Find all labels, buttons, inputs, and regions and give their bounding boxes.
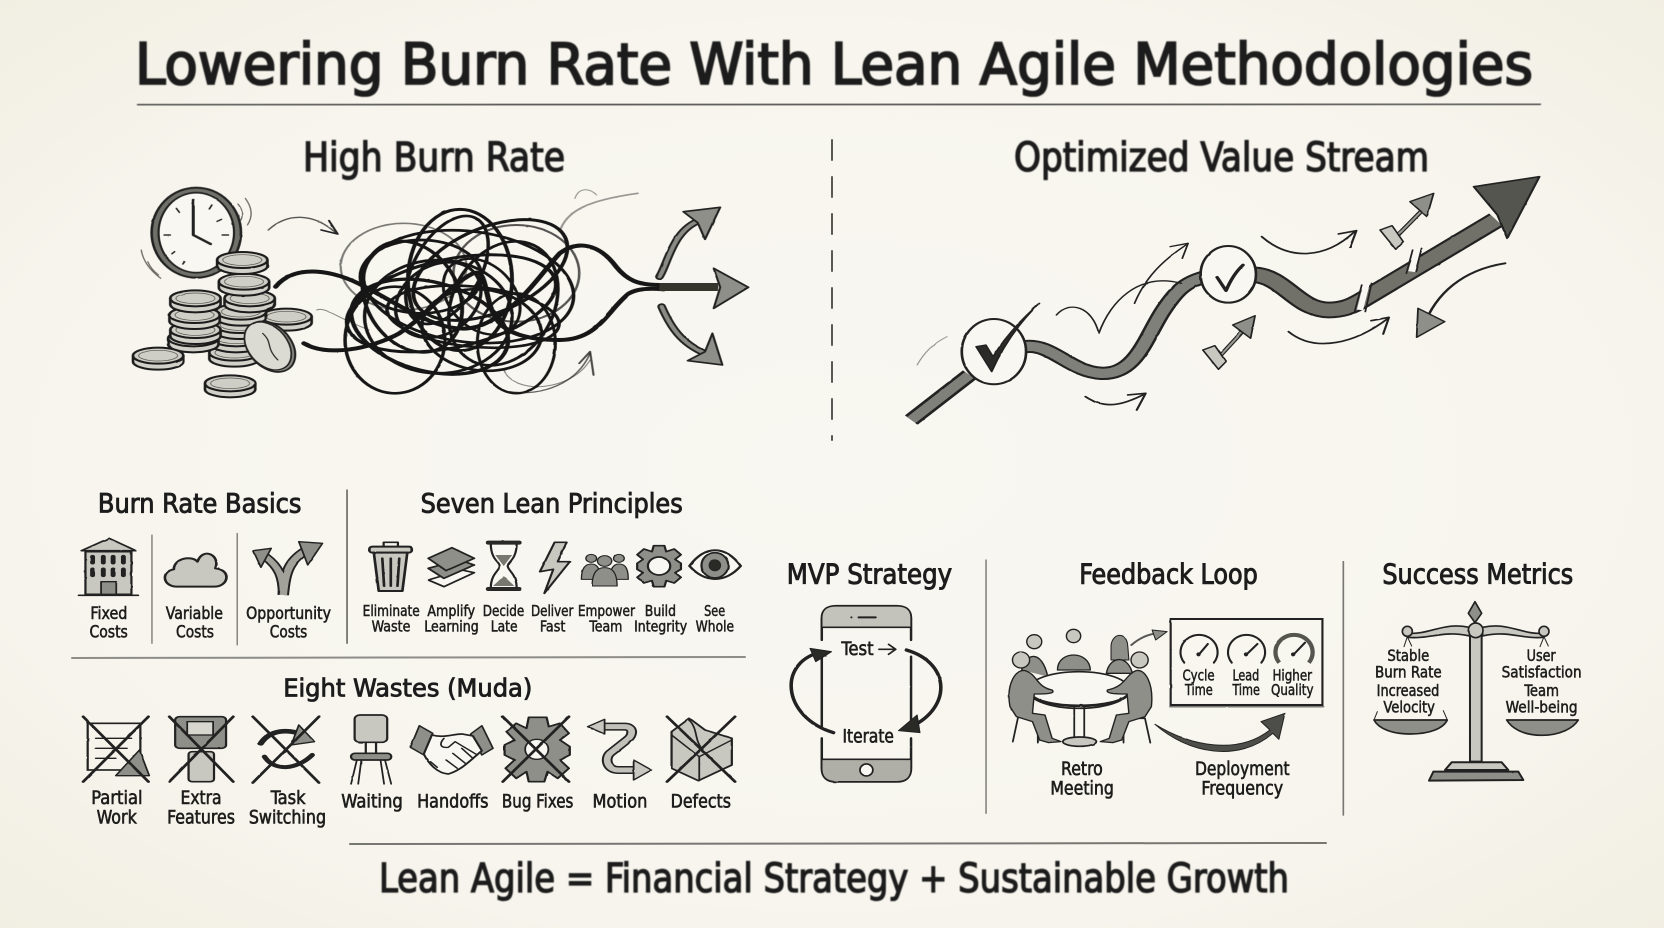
label: left pan metrics: Stable [1387, 646, 1429, 665]
label: bug fixes: Bug Fixes [502, 791, 573, 812]
label: deliver fast: Deliver [531, 603, 574, 620]
label: cycle time [1182, 667, 1215, 699]
label: opportunity costs: Opportunity [246, 603, 331, 623]
label: variable costs: Variable [166, 603, 223, 623]
arrows: small motion [268, 190, 638, 393]
label: retro meeting: Meeting [1050, 777, 1114, 799]
illustration: retro meeting [1009, 629, 1152, 746]
icon: clock [141, 188, 251, 278]
label: extra features [167, 788, 235, 828]
label: waiting: Waiting [341, 791, 403, 812]
arrow: deployment frequency [1155, 713, 1285, 752]
label: cycle time: Cycle [1182, 667, 1215, 685]
label: deployment frequency: Deployment [1195, 758, 1290, 780]
footer tagline: Lean Agile = Financial Strategy + Sustainable Growth [379, 856, 1289, 902]
icon: handoffs handshake [410, 726, 493, 774]
label: extra features: Features [167, 807, 235, 828]
label: handoffs: Handoffs [417, 791, 489, 812]
label: lead time: Lead [1232, 667, 1259, 685]
label: defects: Defects [671, 791, 731, 812]
icon: waiting chair [351, 715, 391, 784]
label: decide late [483, 603, 524, 636]
label: left pan metrics: Burn Rate [1375, 663, 1442, 682]
heading: burn rate basics: Burn Rate Basics [98, 489, 302, 519]
label: see whole: Whole [696, 619, 734, 636]
label: right pan metrics [1502, 646, 1582, 717]
arrow: to dashboard [1131, 630, 1167, 645]
icon: phone with loop [791, 606, 941, 782]
panel: high burn rate [133, 135, 748, 397]
label: task switching: Task [270, 788, 306, 809]
heading: feedback loop: Feedback Loop [1079, 557, 1258, 590]
label: variable costs [166, 603, 223, 642]
label: see whole: See [704, 603, 725, 620]
icon: hourglass [486, 541, 521, 591]
label: deployment frequency [1195, 758, 1290, 799]
illustration: clock, coins, tangle, arrows [133, 188, 748, 397]
icon: coin stacks [133, 252, 312, 397]
icon: balance scale [1374, 602, 1578, 781]
panel: burn rate basics and lean principles [79, 489, 741, 645]
icon: check circle 1 [962, 303, 1039, 384]
label: amplify learning [424, 603, 479, 636]
heading: optimized value stream: Optimized Value Stream [1014, 135, 1429, 181]
label: build integrity [634, 603, 687, 636]
label: iterate: Iterate [842, 726, 894, 747]
icon: task switching [253, 717, 319, 783]
heading: seven lean principles: Seven Lean Principles [421, 489, 683, 519]
label: opportunity costs: Costs [270, 621, 307, 642]
scribble tangle [276, 199, 664, 393]
icon: team people [581, 554, 628, 586]
label: opportunity costs [246, 603, 331, 642]
panel: mvp strategy and feedback loop [787, 557, 1324, 813]
title: Lowering Burn Rate With Lean Agile Methodologies [135, 32, 1533, 98]
label: fixed costs: Fixed [90, 603, 127, 623]
icon: motion arrow [588, 719, 651, 780]
label: deliver fast [531, 603, 574, 636]
label: eliminate waste: Eliminate [363, 603, 420, 620]
dashboard: metric gauges [1170, 619, 1324, 707]
label: deployment frequency: Frequency [1201, 777, 1283, 799]
label: left pan metrics: Velocity [1383, 698, 1435, 717]
label: empower team: Empower [578, 603, 635, 620]
heading: eight wastes: Eight Wastes (Muda) [283, 674, 532, 703]
label: partial work [91, 788, 143, 828]
label: build integrity: Integrity [634, 619, 687, 636]
label: variable costs: Costs [176, 621, 214, 642]
label: empower team: Team [589, 619, 622, 636]
icon: fixed costs building [79, 538, 138, 595]
center dashed divider [831, 140, 833, 440]
arrows: three exits [659, 207, 748, 365]
label: partial work: Work [97, 807, 137, 828]
label: build integrity: Build [645, 603, 676, 620]
label: left pan metrics: Increased [1377, 681, 1439, 700]
icon: gear [637, 546, 681, 587]
title rule [138, 104, 1540, 105]
icon: partial work [83, 717, 149, 782]
label: fixed costs [89, 603, 128, 642]
label: deliver fast: Fast [540, 619, 565, 636]
label: extra features: Extra [181, 788, 222, 809]
panel: optimized value stream [911, 135, 1539, 420]
icon: bug fixes gear [503, 717, 570, 782]
label: task switching: Switching [249, 807, 326, 828]
label: task switching [249, 788, 326, 828]
label: decide late: Late [491, 619, 518, 636]
heading: mvp strategy: MVP Strategy [787, 557, 952, 590]
label: fixed costs: Costs [89, 621, 128, 642]
label: higher quality: Quality [1271, 681, 1314, 699]
heading: success metrics: Success Metrics [1382, 557, 1573, 590]
icon: extra features [169, 717, 233, 782]
label: lead time [1232, 667, 1260, 699]
label: see whole [696, 603, 734, 636]
label: right pan metrics: Satisfaction [1502, 663, 1582, 682]
label: motion: Motion [593, 791, 647, 812]
label: retro meeting [1050, 758, 1114, 799]
label: decide late: Decide [483, 603, 524, 620]
label: test [840, 639, 896, 660]
label: right pan metrics: Team [1523, 681, 1559, 700]
label: partial work: Partial [91, 788, 143, 809]
stream: main ribbon arrow [911, 177, 1539, 420]
label: amplify learning: Learning [424, 619, 479, 636]
label: higher quality [1271, 667, 1314, 699]
label: cycle time: Time [1184, 681, 1213, 699]
panel: success metrics [1343, 557, 1582, 815]
label: amplify learning: Amplify [427, 603, 475, 620]
icon: eye [689, 550, 741, 579]
label: test: Test [840, 639, 874, 660]
label: eliminate waste: Waste [372, 619, 410, 636]
illustration: rising stream [911, 177, 1539, 420]
panel: eight wastes [83, 674, 735, 828]
label: lead time: Time [1232, 681, 1260, 699]
icon: defects broken box [667, 717, 735, 782]
arrows: small motion [917, 231, 1505, 410]
icon: pencil arrows [1203, 193, 1434, 369]
label: eliminate waste [363, 603, 420, 636]
icon: lightning bolt [540, 542, 570, 593]
label: higher quality: Higher [1272, 667, 1312, 685]
heading: high burn rate: High Burn Rate [303, 135, 565, 181]
icon: trash can [369, 542, 412, 591]
icon: books [428, 548, 474, 587]
label: right pan metrics: Well-being [1506, 698, 1578, 717]
label: right pan metrics: User [1527, 646, 1556, 665]
label: empower team [578, 603, 635, 636]
icon: check circle 2 [1201, 246, 1256, 303]
icon: opportunity costs fork [253, 542, 322, 595]
label: retro meeting: Retro [1061, 758, 1103, 780]
label: left pan metrics [1375, 646, 1442, 717]
icon: variable costs cloud [165, 554, 226, 587]
